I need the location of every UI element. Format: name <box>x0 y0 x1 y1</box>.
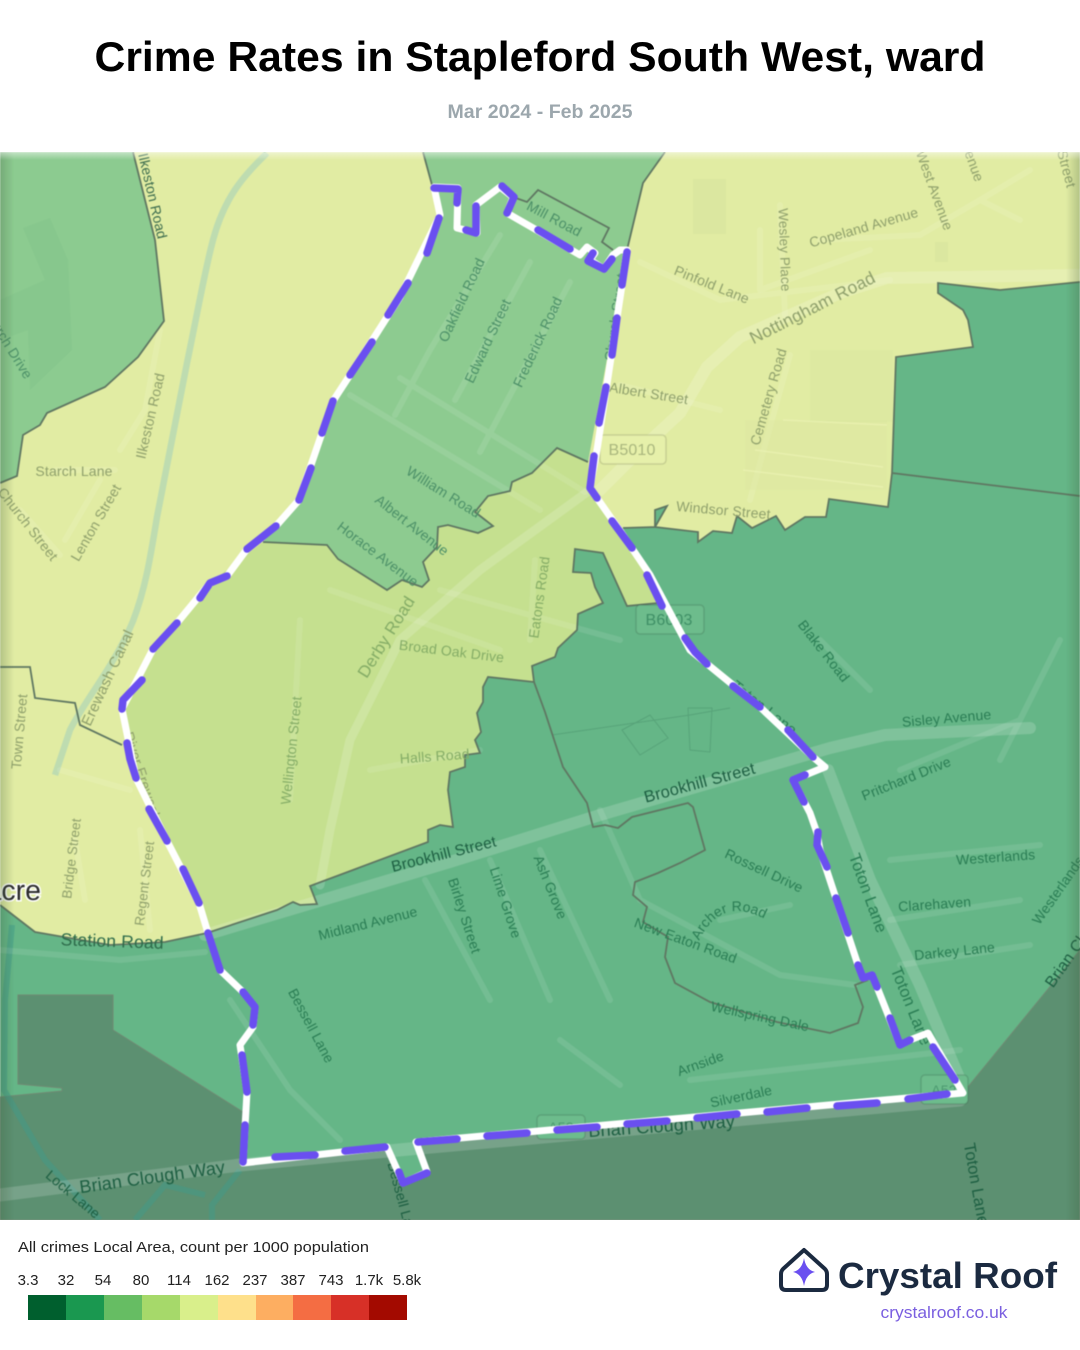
ward boundary: purple dashes <box>122 186 955 1183</box>
road labels: River Erewash <box>121 730 165 823</box>
road labels: Station Road <box>60 929 164 953</box>
road labels: Frederick Road <box>510 294 565 390</box>
road labels: Brookhill Street <box>390 833 499 876</box>
road labels: New Eaton Road <box>632 914 739 966</box>
road labels: Darkey Lane <box>913 939 996 963</box>
road labels: Toton Lane <box>887 964 935 1048</box>
road labels: Bessell Lane <box>285 986 338 1066</box>
road labels: Regent Street <box>132 840 157 927</box>
road labels: Wellspring Dale <box>709 998 811 1034</box>
road labels: Cemetery Road <box>747 346 790 447</box>
road labels: Eatons Road <box>525 555 553 639</box>
minor roads <box>0 170 1060 1140</box>
patches inside top-left green <box>0 218 72 390</box>
buildings and parks <box>693 179 948 490</box>
road labels: Avenue <box>956 133 987 184</box>
legend value labels: 162 <box>204 1272 230 1289</box>
road labels: Birley Street <box>445 876 484 955</box>
legend value labels: 1.7k <box>355 1272 384 1289</box>
region: dark south band <box>0 950 1080 1220</box>
road labels: Rossell Drive <box>722 845 806 896</box>
logo url: crystalroof.co.uk <box>880 1303 1008 1322</box>
road labels: Midland Avenue <box>317 903 419 943</box>
road labels: Toton Lane <box>960 1142 992 1227</box>
road labels: Silverdale <box>708 1082 773 1110</box>
region: mid green south and east <box>0 282 1080 1220</box>
road labels: Clarehaven <box>898 893 972 915</box>
legend value labels: 32 <box>58 1272 74 1289</box>
legend colour scale <box>28 1295 407 1320</box>
road labels: Ash Grove <box>531 853 571 921</box>
road labels: Bridge Street <box>59 817 84 899</box>
road labels: B6003 <box>645 612 693 629</box>
ward and area boundary lines <box>0 152 1080 1033</box>
road labels: Lenton Street <box>67 481 124 564</box>
road labels: Copeland Avenue <box>807 204 920 250</box>
road labels: Ilkeston Road <box>135 151 171 240</box>
road labels: Sisley Avenue <box>901 706 992 730</box>
road labels: Lime Grove <box>487 865 525 940</box>
road labels: Horace Avenue <box>334 518 422 590</box>
road labels: Starch Lane <box>35 463 113 479</box>
ward boundary: white outline <box>122 187 963 1183</box>
road labels: Derby Road <box>354 593 419 681</box>
road labels: Halls Road <box>399 746 470 766</box>
road labels: Broad Oak Drive <box>398 637 505 665</box>
legend value labels: 237 <box>242 1272 268 1289</box>
road labels: Albert Avenue <box>372 491 452 559</box>
water: canal <box>55 153 267 775</box>
logo wordmark: Crystal Roof <box>838 1255 1058 1296</box>
map edge vignette <box>0 152 1080 1220</box>
legend <box>18 1239 422 1320</box>
road labels: Windsor Street <box>676 498 771 522</box>
road labels: Brian Clough Way <box>588 1111 735 1141</box>
road labels: A52 <box>931 1082 957 1098</box>
road labels: Ilkeston Road <box>132 371 168 460</box>
water: river <box>4 925 240 1220</box>
major roads <box>0 275 1080 1195</box>
legend value labels: 387 <box>280 1272 306 1289</box>
region: top-left green <box>0 152 164 483</box>
road labels: Mill Road <box>524 198 584 240</box>
road labels: Blake Road <box>795 617 853 685</box>
legend value labels: 114 <box>167 1272 191 1289</box>
legend value labels: 5.8k <box>393 1272 422 1289</box>
road labels: Archer Road <box>692 901 768 941</box>
road labels: Street <box>1054 148 1080 189</box>
legend value labels: 80 <box>133 1272 149 1289</box>
legend value labels <box>18 1272 422 1289</box>
title: Crime Rates in Stapleford South West, ward <box>94 33 986 80</box>
road labels: Edward Street <box>461 296 514 385</box>
road labels: Lock Lane <box>43 1167 104 1222</box>
region: light green west of ward <box>122 448 658 933</box>
road labels: Town Street <box>8 693 30 770</box>
region: north green inside ward <box>263 152 665 590</box>
road labels: Church Street <box>601 272 629 362</box>
legend value labels: 54 <box>95 1272 111 1289</box>
road labels: Nottingham Road <box>746 267 878 348</box>
road labels: Bessell Lane <box>384 1160 421 1243</box>
road labels: Toton Lane <box>845 851 890 935</box>
road labels: A52 <box>548 1119 574 1135</box>
road labels: William Road <box>404 463 484 521</box>
road labels: Arnside <box>675 1047 726 1079</box>
road labels: Erewash Canal <box>78 628 138 729</box>
road labels: Wesley Place <box>776 208 793 292</box>
icon: house with sparkle <box>781 1250 827 1290</box>
road labels: Oakfield Road <box>435 255 488 344</box>
road labels: Pritchard Drive <box>859 753 953 804</box>
road labels: Westerlands <box>956 846 1036 868</box>
legend value labels: 743 <box>318 1272 344 1289</box>
road labels: Pinfold Lane <box>672 262 752 307</box>
logo: Crystal Roof <box>781 1250 1058 1322</box>
road labels: West Avenue <box>913 148 957 232</box>
subtitle: date range: Mar 2024 - Feb 2025 <box>448 102 633 123</box>
region: pale yellow base <box>0 152 1080 952</box>
road labels: Albert Street <box>608 379 689 407</box>
road labels: Brookhill Street <box>642 760 757 807</box>
road labels: Wellington Street <box>277 695 305 805</box>
legend value labels: 3.3 <box>18 1272 38 1289</box>
road labels: Toton Lane <box>728 678 800 739</box>
legend title: All crimes Local Area, count per 1000 population <box>18 1239 369 1256</box>
road shields <box>537 435 968 1139</box>
road labels: B5010 <box>608 442 656 459</box>
cemetery paths <box>743 420 887 487</box>
playing fields north of Brookhill Street <box>552 708 730 755</box>
road labels: Brian Clough Way <box>78 1157 226 1197</box>
